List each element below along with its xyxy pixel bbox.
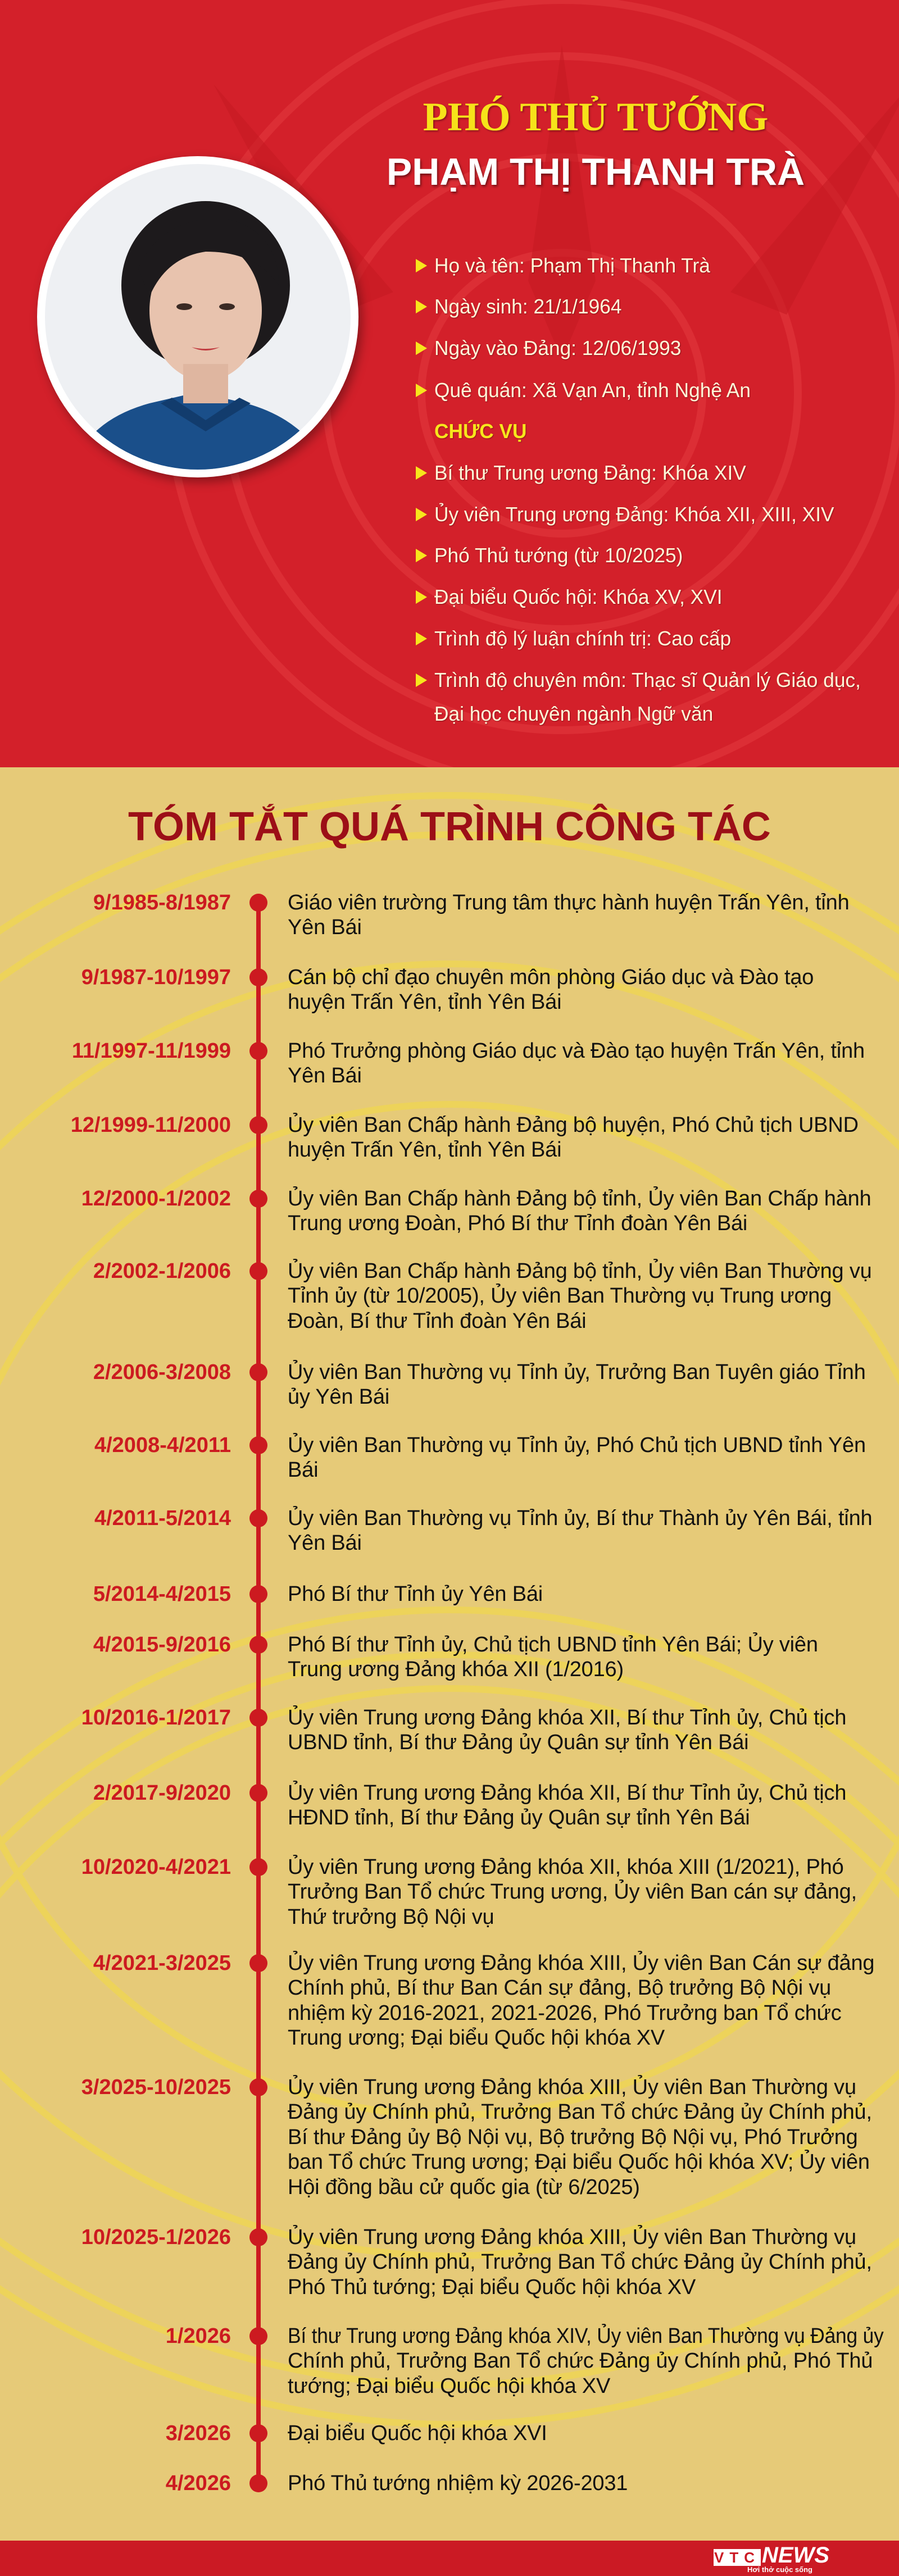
timeline: 2/2017-9/2020 bbox=[93, 1781, 231, 1805]
timeline: nhiệm kỳ 2016-2021, 2021-2026, Phó Trưởng ban Tổ chức bbox=[288, 2001, 842, 2025]
timeline: Ủy viên Ban Chấp hành Đảng bộ tỉnh, Ủy viên Ban Thường vụ bbox=[288, 1259, 872, 1283]
timeline: Ủy viên Trung ương Đảng khóa XIII, Ủy viên Ban Cán sự đảng bbox=[288, 1951, 874, 1975]
timeline: 9/1985-8/1987 bbox=[93, 891, 231, 914]
bullet: hometown: Quê quán: Xã Vạn An, tỉnh Nghệ An bbox=[434, 379, 751, 402]
logo: VTC News: NEWS bbox=[762, 2543, 829, 2568]
timeline: Ủy viên Trung ương Đảng khóa XII, khóa XIII (1/2021), Phó bbox=[288, 1855, 844, 1879]
bullet: position 3: Phó Thủ tướng (từ 10/2025) bbox=[434, 544, 683, 567]
timeline: Đảng ủy Chính phủ, Trưởng Ban Tổ chức Đảng ủy Chính phủ, bbox=[288, 2100, 872, 2124]
title bbox=[387, 94, 806, 195]
entry 17 bbox=[81, 2225, 872, 2299]
timeline: 4/2015-9/2016 bbox=[93, 1633, 231, 1656]
entry 3 bbox=[72, 1039, 865, 1087]
entry 1 bbox=[93, 891, 850, 939]
entry 16 bbox=[81, 2075, 872, 2199]
timeline: tướng; Đại biểu Quốc hội khóa XV bbox=[288, 2374, 610, 2398]
timeline: Cán bộ chỉ đạo chuyên môn phòng Giáo dục và Đào tạo bbox=[288, 966, 814, 989]
entry 2 bbox=[81, 966, 814, 1014]
entry 6 bbox=[93, 1259, 872, 1333]
bullet: position 6: Trình độ chuyên môn: Thạc sĩ Quản lý Giáo dục, bbox=[434, 668, 861, 691]
bullet: name: Họ và tên: Phạm Thị Thanh Trà bbox=[434, 254, 710, 277]
timeline: Đảng ủy Chính phủ, Trưởng Ban Tổ chức Đảng ủy Chính phủ, bbox=[288, 2250, 872, 2274]
timeline: Trung ương; Đại biểu Quốc hội khóa XV bbox=[288, 2026, 665, 2050]
timeline: Trung ương Đảng khóa XII (1/2016) bbox=[288, 1658, 624, 1681]
logo: VTC News: Hơi thở cuộc sống bbox=[747, 2565, 812, 2574]
timeline: UBND tỉnh, Bí thư Đảng ủy Quân sự tỉnh Yên Bái bbox=[288, 1731, 748, 1754]
timeline: Bí thư Đảng ủy Bộ Nội vụ, Bộ trưởng Bộ Nội vụ, Phó Trưởng bbox=[288, 2126, 858, 2149]
entry 19 bbox=[166, 2422, 547, 2445]
logo: VTC News bbox=[714, 2543, 829, 2574]
timeline: Trung ương Đoàn, Phó Bí thư Tỉnh đoàn Yên Bái bbox=[288, 1212, 747, 1235]
entry 20 bbox=[166, 2472, 628, 2495]
timeline: ban Tổ chức Trung ương; Đại biểu Quốc hội khóa XV; Ủy viên bbox=[288, 2150, 870, 2174]
title line 2: PHẠM THỊ THANH TRÀ bbox=[387, 151, 805, 193]
timeline: 4/2011-5/2014 bbox=[94, 1507, 231, 1530]
timeline: huyện Trấn Yên, tỉnh Yên Bái bbox=[288, 1138, 561, 1162]
timeline: Phó Thủ tướng; Đại biểu Quốc hội khóa XV bbox=[288, 2275, 696, 2299]
entry 9 bbox=[94, 1506, 872, 1555]
timeline: Ủy viên Trung ương Đảng khóa XIII, Ủy viên Ban Thường vụ bbox=[288, 2225, 856, 2249]
timeline: Ủy viên Ban Chấp hành Đảng bộ tỉnh, Ủy viên Ban Chấp hành bbox=[288, 1187, 871, 1210]
timeline: 4/2026 bbox=[166, 2472, 231, 2495]
bullet: position 1: Bí thư Trung ương Đảng: Khóa XIV bbox=[434, 461, 746, 484]
footer bar bbox=[0, 2541, 899, 2576]
bullet: party: Ngày vào Đảng: 12/06/1993 bbox=[434, 336, 681, 359]
timeline: 10/2025-1/2026 bbox=[81, 2225, 231, 2249]
timeline: Ủy viên Trung ương Đảng khóa XII, Bí thư Tỉnh ủy, Chủ tịch bbox=[288, 1781, 846, 1805]
timeline: HĐND tỉnh, Bí thư Đảng ủy Quân sự tỉnh Yên Bái bbox=[288, 1806, 750, 1829]
entry 13 bbox=[93, 1781, 846, 1829]
timeline: 10/2016-1/2017 bbox=[81, 1706, 231, 1730]
timeline: 4/2008-4/2011 bbox=[94, 1433, 231, 1457]
entry 18 bbox=[166, 2324, 884, 2398]
timeline: Giáo viên trường Trung tâm thực hành huyện Trấn Yên, tỉnh bbox=[288, 891, 850, 914]
timeline: Ủy viên Ban Thường vụ Tỉnh ủy, Phó Chủ tịch UBND tỉnh Yên bbox=[288, 1433, 866, 1457]
timeline: 1/2026 bbox=[166, 2324, 231, 2348]
timeline: Bái bbox=[288, 1458, 318, 1482]
timeline: Phó Bí thư Tỉnh ủy Yên Bái bbox=[288, 1582, 543, 1606]
timeline: Yên Bái bbox=[288, 916, 362, 939]
subheading: chuc vu: CHỨC VỤ bbox=[434, 420, 527, 443]
timeline: Phó Bí thư Tỉnh ủy, Chủ tịch UBND tỉnh Yên Bái; Ủy viên bbox=[288, 1633, 818, 1656]
section heading: TÓM TẮT QUÁ TRÌNH CÔNG TÁC bbox=[128, 804, 771, 849]
timeline: 10/2020-4/2021 bbox=[81, 1855, 231, 1879]
timeline: 11/1997-11/1999 bbox=[72, 1039, 231, 1063]
timeline: 2/2006-3/2008 bbox=[93, 1360, 231, 1384]
portrait photo bbox=[37, 156, 358, 477]
entry 5 bbox=[81, 1186, 871, 1235]
timeline: Ủy viên Ban Chấp hành Đảng bộ huyện, Phó Chủ tịch UBND bbox=[288, 1113, 859, 1137]
timeline: 2/2002-1/2006 bbox=[93, 1259, 231, 1283]
timeline: ủy Yên Bái bbox=[288, 1385, 389, 1409]
timeline: Ủy viên Trung ương Đảng khóa XII, Bí thư Tỉnh ủy, Chủ tịch bbox=[288, 1706, 846, 1730]
timeline: Chính phủ, Bí thư Ban Cán sự đảng, Bộ trưởng Bộ Nội vụ bbox=[288, 1976, 831, 2000]
timeline: 3/2026 bbox=[166, 2422, 231, 2445]
timeline: Ủy viên Trung ương Đảng khóa XIII, Ủy viên Ban Thường vụ bbox=[288, 2076, 856, 2099]
logo: VTC News: VTC bbox=[714, 2549, 760, 2566]
entry 4 bbox=[71, 1113, 859, 1162]
bullet: position 6: Đại học chuyên ngành Ngữ văn bbox=[434, 702, 713, 725]
timeline: 4/2021-3/2025 bbox=[93, 1951, 231, 1975]
entry 14 bbox=[81, 1855, 857, 1929]
bullet: position 4: Đại biểu Quốc hội: Khóa XV, XVI bbox=[434, 585, 723, 608]
timeline: Yên Bái bbox=[288, 1064, 362, 1087]
timeline: Hội đồng bầu cử quốc gia (từ 6/2025) bbox=[288, 2176, 640, 2199]
timeline: Ủy viên Ban Thường vụ Tỉnh ủy, Bí thư Thành ủy Yên Bái, tỉnh bbox=[288, 1507, 872, 1530]
timeline: Phó Trưởng phòng Giáo dục và Đào tạo huyện Trấn Yên, tỉnh bbox=[288, 1039, 865, 1063]
bullet: position 5: Trình độ lý luận chính trị: Cao cấp bbox=[434, 627, 731, 650]
timeline: 3/2025-10/2025 bbox=[81, 2076, 231, 2099]
timeline: Đại biểu Quốc hội khóa XVI bbox=[288, 2422, 547, 2445]
entry 12 bbox=[81, 1705, 846, 1754]
timeline: Trưởng Ban Tổ chức Trung ương, Ủy viên Ban cán sự đảng, bbox=[288, 1880, 857, 1904]
timeline: Bí thư Trung ương Đảng khóa XIV, Ủy viên Ban Thường vụ Đảng ủy bbox=[288, 2324, 884, 2348]
entry 10 bbox=[93, 1582, 543, 1606]
timeline: Đoàn, Bí thư Tỉnh đoàn Yên Bái bbox=[288, 1309, 586, 1333]
timeline: huyện Trấn Yên, tỉnh Yên Bái bbox=[288, 990, 561, 1014]
timeline line bbox=[256, 903, 261, 2483]
timeline: 12/1999-11/2000 bbox=[71, 1113, 231, 1137]
entry 7 bbox=[93, 1360, 866, 1409]
title line 1: PHÓ THỦ TƯỚNG bbox=[423, 94, 768, 139]
timeline section background bbox=[0, 792, 899, 2428]
entry 11 bbox=[93, 1632, 818, 1681]
bullet: position 2: Ủy viên Trung ương Đảng: Khóa XII, XIII, XIV bbox=[434, 503, 834, 526]
entry 8 bbox=[94, 1433, 866, 1482]
timeline: Thứ trưởng Bộ Nội vụ bbox=[288, 1905, 494, 1929]
timeline: 12/2000-1/2002 bbox=[81, 1187, 231, 1210]
bullet: position 6 bbox=[416, 668, 861, 726]
header panel bbox=[0, 0, 899, 767]
timeline: Chính phủ, Trưởng Ban Tổ chức Đảng ủy Chính phủ, Phó Thủ bbox=[288, 2349, 873, 2373]
bullet: dob: Ngày sinh: 21/1/1964 bbox=[434, 295, 621, 318]
timeline: Tỉnh ủy (từ 10/2005), Ủy viên Ban Thường vụ Trung ương bbox=[288, 1284, 832, 1308]
entry 15 bbox=[93, 1951, 874, 2050]
timeline: Yên Bái bbox=[288, 1531, 362, 1555]
timeline: 9/1987-10/1997 bbox=[81, 966, 231, 989]
timeline: Phó Thủ tướng nhiệm kỳ 2026-2031 bbox=[288, 2472, 628, 2495]
timeline: 5/2014-4/2015 bbox=[93, 1582, 231, 1606]
info list bbox=[416, 254, 861, 726]
timeline: Ủy viên Ban Thường vụ Tỉnh ủy, Trưởng Ban Tuyên giáo Tỉnh bbox=[288, 1360, 866, 1384]
